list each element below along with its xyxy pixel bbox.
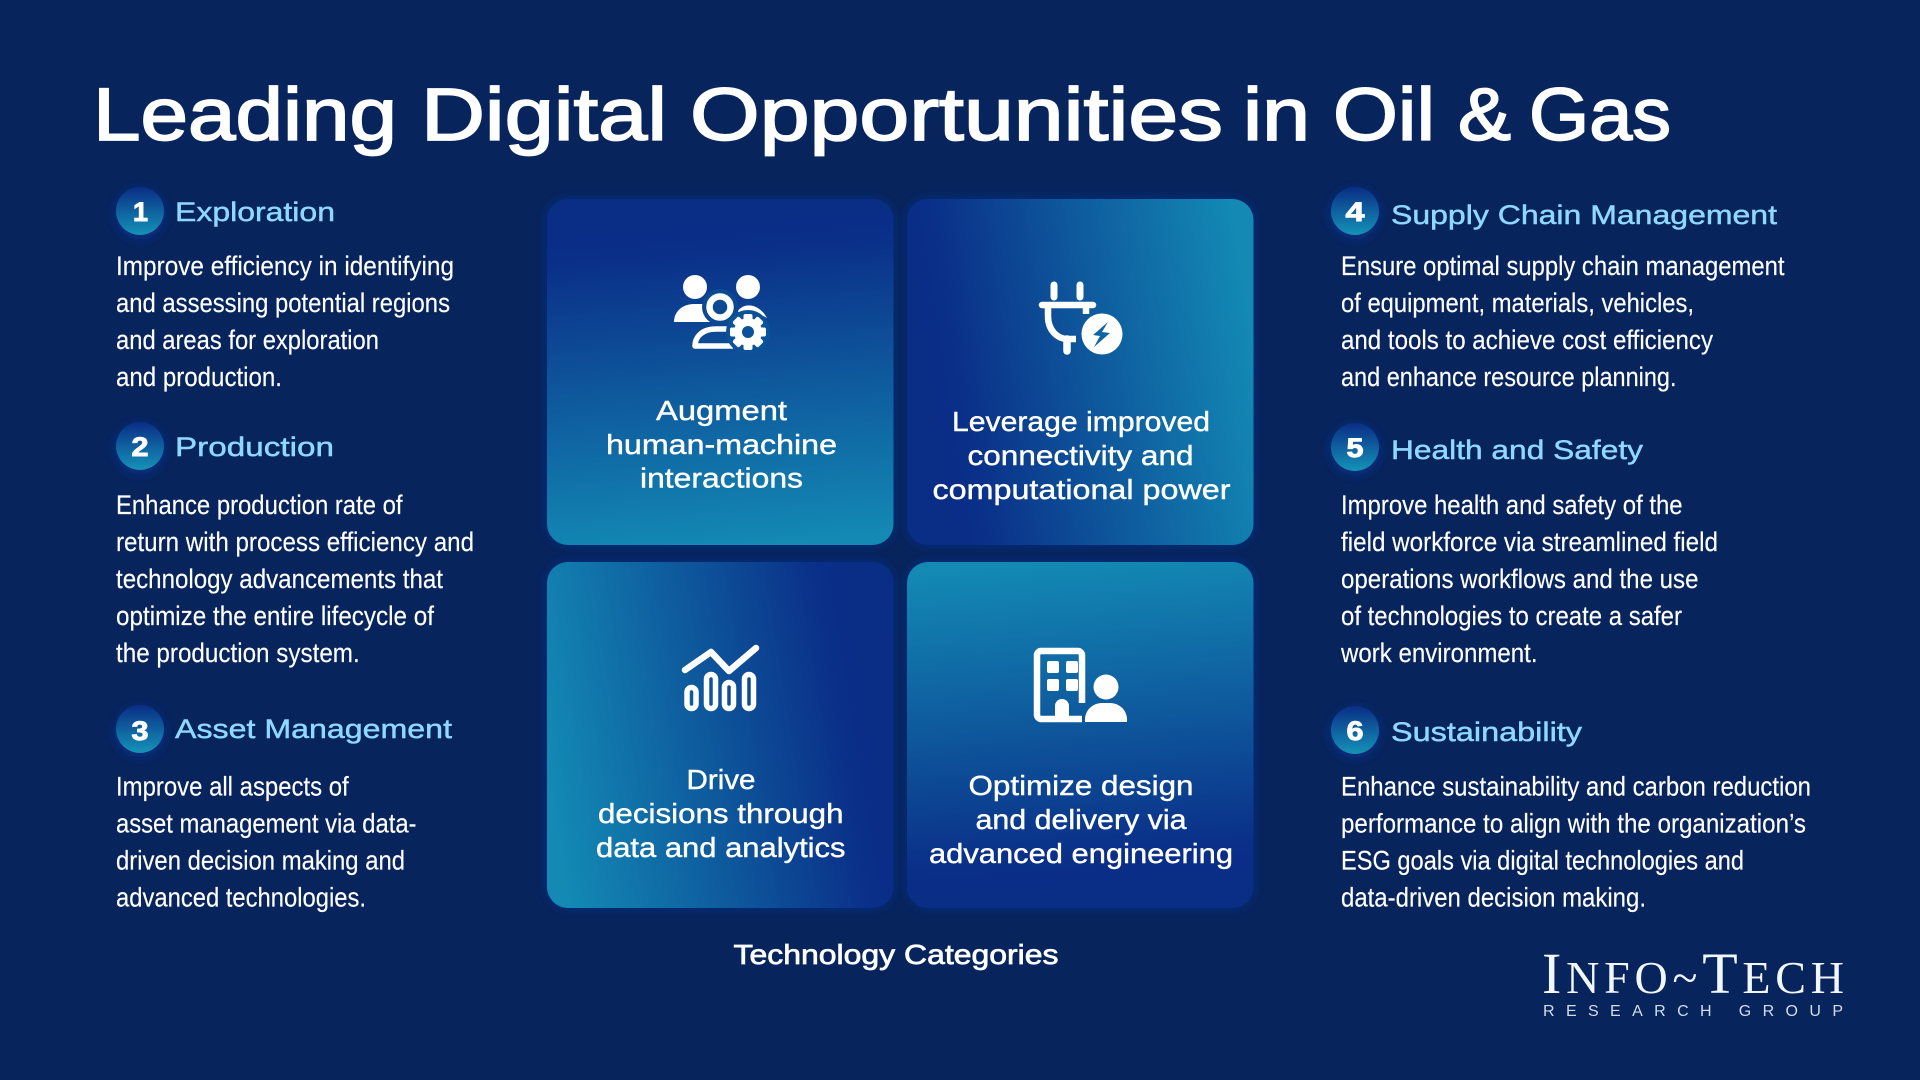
body text: Asset Management: advanced technologies.: [116, 882, 366, 912]
card: advanced engineering: [907, 562, 1254, 908]
item 5: Health and Safety: [1330, 423, 1718, 668]
panel: technology category cards: [547, 199, 1254, 908]
body text: Exploration: and production.: [116, 362, 282, 392]
body text: Sustainability: performance to align with the organization’s: [1341, 808, 1806, 838]
title: Opportunities: [690, 73, 1223, 156]
body text: Production: the production system.: [116, 638, 360, 668]
item 4: Supply Chain Management: [1330, 187, 1785, 392]
body text: Sustainability: [1341, 772, 1811, 912]
icon: plug with lightning: [1042, 285, 1122, 354]
title: [93, 73, 1671, 156]
body text: Sustainability: Enhance sustainability and carbon reduction: [1341, 772, 1811, 802]
body text: Production: [116, 490, 474, 668]
body text: Supply Chain Management: Ensure optimal supply chain management: [1341, 251, 1785, 281]
label: [929, 770, 1233, 869]
caption: Technology Categories: Technology Categories: [734, 939, 1058, 970]
body text: Exploration: and assessing potential regions: [116, 288, 450, 318]
number badge 5: 5: [1346, 433, 1364, 463]
label: Optimize design: [968, 770, 1194, 801]
item 1: Exploration: [115, 187, 454, 392]
body text: Asset Management: driven decision making and: [116, 846, 405, 876]
label: decisions through: [598, 798, 844, 829]
label: [596, 764, 846, 863]
body text: Supply Chain Management: of equipment, materials, vehicles,: [1341, 288, 1694, 318]
body text: Sustainability: data-driven decision making.: [1341, 882, 1646, 912]
number badge 4: 4: [1346, 197, 1364, 227]
label: computational power: [932, 474, 1230, 505]
body text: Health and Safety: Improve health and safety of the: [1341, 490, 1683, 520]
icon: building and person: [1037, 651, 1127, 722]
body text: Health and Safety: of technologies to create a safer: [1341, 601, 1682, 631]
icon: trend line and bars: [685, 648, 756, 708]
body text: Sustainability: ESG goals via digital technologies and: [1341, 846, 1744, 876]
body text: Exploration: and areas for exploration: [116, 325, 379, 355]
number badge 4: [1330, 187, 1380, 239]
body text: Asset Management: Improve all aspects of: [116, 772, 349, 802]
heading: Sustainability: Sustainability: [1391, 717, 1583, 747]
label: connectivity and: [968, 440, 1194, 471]
heading: Supply Chain Management: Supply Chain Management: [1391, 200, 1778, 230]
label: data and analytics: [596, 832, 846, 863]
panel: right opportunities column: [1330, 187, 1811, 912]
body text: Supply Chain Management: [1341, 251, 1785, 392]
label: interactions: [640, 462, 803, 494]
label: Drive: [686, 764, 756, 795]
label: and delivery via: [976, 804, 1187, 835]
number badge 3: 3: [132, 716, 148, 746]
title: in: [1243, 73, 1310, 156]
number badge 5: [1330, 423, 1380, 475]
label: [606, 395, 837, 494]
number badge 2: [115, 422, 165, 474]
body text: Asset Management: asset management via data-: [116, 808, 416, 838]
logo: Info-Tech Research Group: INFO~TECH: [1542, 941, 1844, 1006]
body text: Production: return with process efficiency and: [116, 527, 474, 557]
label: advanced engineering: [929, 838, 1233, 869]
heading: Production: Production: [175, 432, 334, 462]
number badge 1: 1: [133, 197, 148, 227]
number badge 2: 2: [132, 432, 148, 462]
title: &: [1458, 73, 1511, 156]
heading: Exploration: Exploration: [175, 197, 335, 227]
label: Augment: [656, 395, 787, 426]
title: Digital: [421, 73, 667, 156]
label: Leverage improved: [952, 406, 1210, 437]
heading: Asset Management: Asset Management: [175, 714, 453, 744]
title: Oil: [1333, 73, 1435, 156]
body text: Production: optimize the entire lifecycle of: [116, 601, 434, 631]
label: human-machine: [606, 429, 837, 460]
number badge 6: [1330, 706, 1380, 758]
icon: people and gear: [674, 275, 770, 354]
item 6: Sustainability: [1330, 706, 1811, 912]
body text: Exploration: Improve efficiency in identifying: [116, 251, 454, 281]
heading: Health and Safety: Health and Safety: [1391, 435, 1644, 465]
body text: Health and Safety: field workforce via streamlined field: [1341, 527, 1718, 557]
item 2: Production: [115, 422, 474, 668]
label: [932, 406, 1230, 505]
card: data and analytics: [547, 562, 894, 908]
number badge 6: 6: [1346, 716, 1364, 746]
panel: left opportunities column: [115, 187, 474, 912]
body text: Health and Safety: operations workflows and the use: [1341, 564, 1698, 594]
body text: Health and Safety: work environment.: [1340, 638, 1538, 668]
title: Leading: [93, 73, 397, 156]
body text: Asset Management: [116, 772, 416, 912]
body text: Supply Chain Management: and tools to achieve cost efficiency: [1341, 325, 1713, 355]
body text: Exploration: [116, 251, 454, 392]
number badge 3: [115, 705, 165, 757]
title: Gas: [1529, 73, 1671, 156]
body text: Production: Enhance production rate of: [116, 490, 403, 520]
card: human-machine interactions: [547, 199, 894, 545]
body text: Health and Safety: [1340, 490, 1718, 668]
logo: Info-Tech Research Group: RESEARCH GROUP: [1543, 1003, 1843, 1020]
body text: Production: technology advancements that: [116, 564, 443, 594]
body text: Supply Chain Management: and enhance resource planning.: [1341, 362, 1676, 392]
item 3: Asset Management: [115, 705, 453, 912]
number badge 1: [115, 187, 165, 239]
card: connectivity and computational power: [907, 199, 1254, 545]
